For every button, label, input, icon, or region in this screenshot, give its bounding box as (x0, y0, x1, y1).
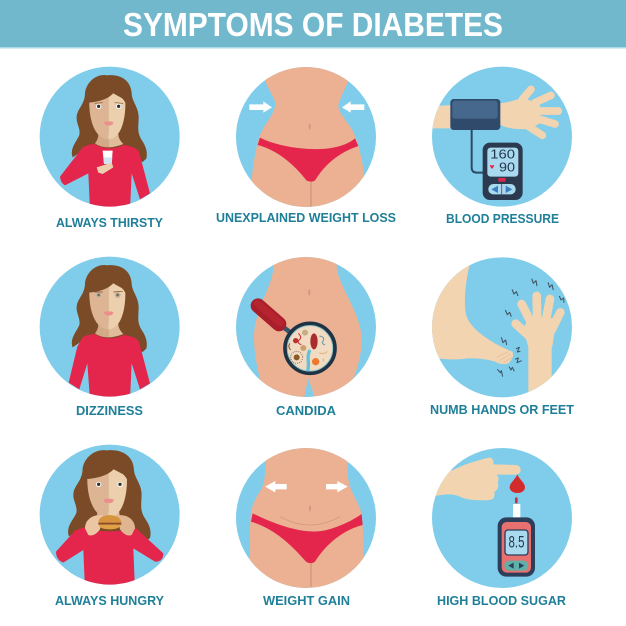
panel: high blood sugar: 8.5 (508, 533, 524, 552)
icon: pointing hand (425, 457, 521, 500)
panel: high blood sugar (425, 448, 572, 608)
panel: weight gain (236, 440, 376, 608)
title banner: SYMPTOMS OF DIABETES (123, 6, 503, 43)
panel: dizziness (40, 257, 180, 418)
panel: weight gain: WEIGHT GAIN (263, 593, 350, 608)
panel: blood pressure (425, 67, 572, 226)
panel: numb hands or feet (425, 257, 574, 417)
panel: blood pressure: 160 (490, 148, 515, 162)
panel: blood pressure: 90 (499, 160, 515, 174)
title banner (0, 0, 626, 48)
icon: magnifier (257, 303, 335, 373)
panel: always thirsty: ALWAYS THIRSTY (56, 215, 163, 230)
panel: candida (236, 250, 376, 418)
icon: hand (498, 89, 558, 135)
panel: high blood sugar: HIGH BLOOD SUGAR (437, 593, 567, 608)
panel: always hungry: ALWAYS HUNGRY (55, 593, 164, 608)
panel: unexplained weight loss (216, 60, 396, 225)
icon: tingling marks (497, 279, 564, 377)
panel: unexplained weight loss: UNEXPLAINED WEIGHT LOSS (216, 210, 396, 225)
panel: always thirsty (40, 67, 180, 230)
panel: dizziness: DIZZINESS (76, 403, 143, 418)
panel: always hungry (40, 445, 180, 608)
panel: candida: CANDIDA (276, 403, 337, 418)
panel: blood pressure: BLOOD PRESSURE (446, 211, 559, 226)
panel: numb hands or feet: NUMB HANDS OR FEET (430, 402, 574, 417)
